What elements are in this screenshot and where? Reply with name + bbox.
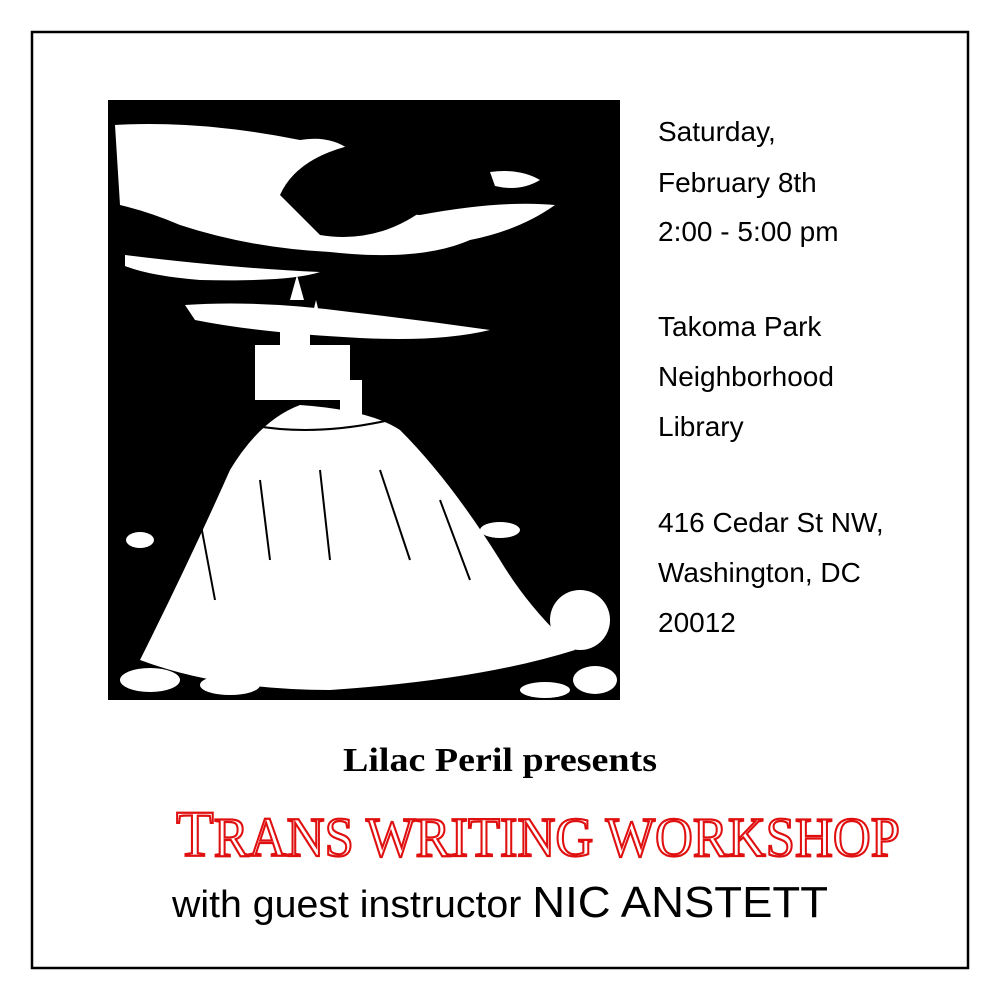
- instructor line: with guest instructor NIC ANSTETT: [171, 878, 828, 927]
- event details: Washington, DC: [658, 557, 861, 588]
- event details: Library: [658, 411, 744, 442]
- event details: [658, 116, 884, 638]
- event details: Saturday,: [658, 116, 776, 147]
- event details: 2:00 - 5:00 pm: [658, 216, 839, 247]
- presenter line: Lilac Peril presents: [343, 742, 657, 779]
- illustration: castle on mountain: [108, 100, 620, 700]
- event details: February 8th: [658, 167, 817, 198]
- event details: 416 Cedar St NW,: [658, 507, 884, 538]
- event details: 20012: [658, 607, 736, 638]
- event details: Neighborhood: [658, 361, 834, 392]
- clouds: [115, 124, 555, 339]
- mountain: [140, 405, 575, 690]
- event details: Takoma Park: [658, 311, 822, 342]
- title: TRANS WRITING WORKSHOP: [176, 798, 900, 871]
- castle: [255, 275, 362, 415]
- rocks: [120, 522, 617, 698]
